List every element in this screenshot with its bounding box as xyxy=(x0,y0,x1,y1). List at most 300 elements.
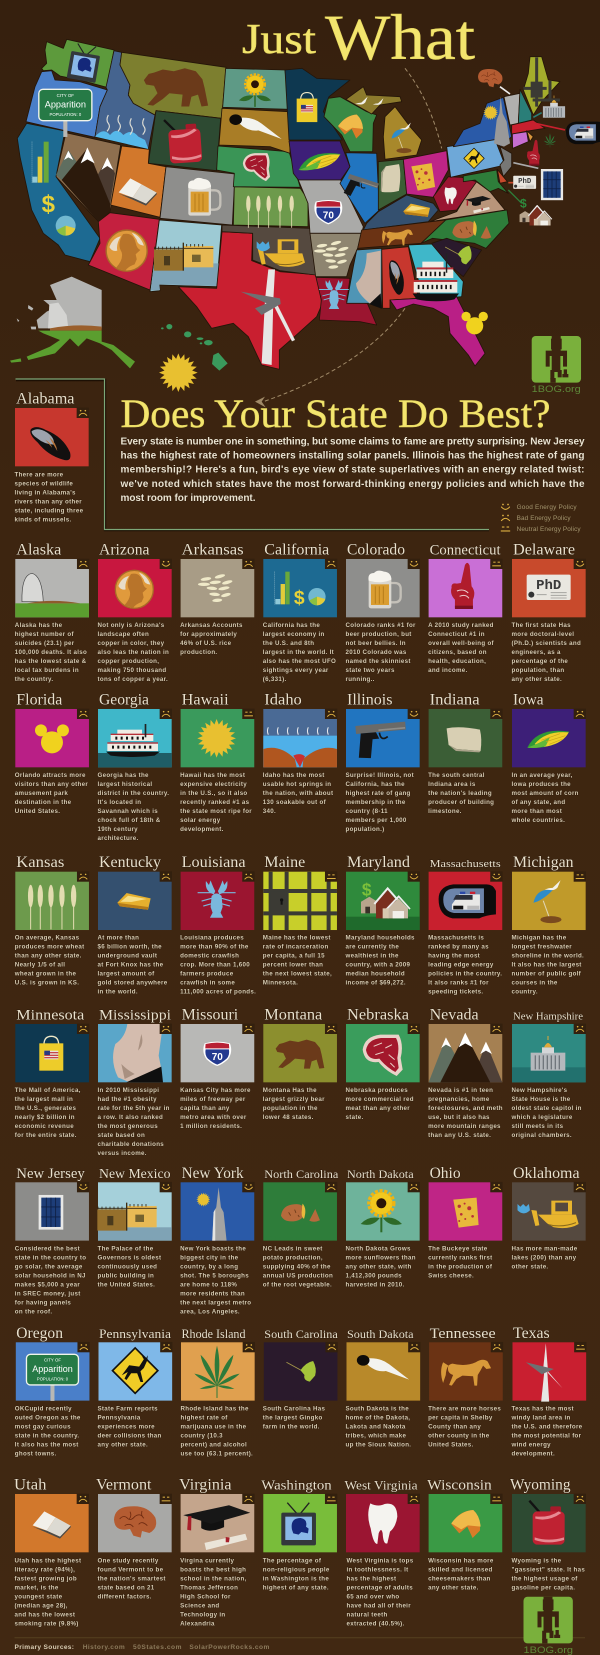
panel: Alabama: Alabama xyxy=(16,390,75,408)
card: Connecticut: Connecticut xyxy=(430,542,501,558)
card: Arizona: making 750 thousand xyxy=(98,667,166,674)
card: Oregon: state in the country. xyxy=(15,1432,79,1439)
icon: corn xyxy=(299,153,341,170)
icon: steak xyxy=(243,153,270,181)
card: Kansas: On average, Kansas xyxy=(15,935,80,942)
icon: copper penny xyxy=(106,230,147,271)
card: Alaska: local tax burdens in xyxy=(15,667,79,674)
icon: dollar and house xyxy=(508,190,552,225)
card: West Virginia: have had all of their xyxy=(346,1602,411,1610)
state: Wisconsin xyxy=(324,97,377,152)
card: Vermont: Vermont xyxy=(96,1476,152,1494)
icon: gulls xyxy=(355,97,383,105)
icon: chart, dollar and pie xyxy=(32,142,76,236)
card: Alaska: the country. xyxy=(15,676,53,683)
card: Minnesota: economic revenue xyxy=(15,1123,74,1130)
card: Colorado: Colorado xyxy=(347,542,405,558)
card: Georgia: district in the country. xyxy=(98,790,169,797)
card: Colorado xyxy=(346,542,420,683)
icon: hot springs xyxy=(95,115,148,149)
card: Indiana: Indiana xyxy=(430,692,480,708)
card: Ohio xyxy=(428,1165,503,1279)
card: Kentucky: gold stored anywhere xyxy=(98,980,168,987)
card: Louisiana: domestic crawfish xyxy=(180,953,239,960)
state: Montana xyxy=(120,52,226,118)
icon: swiss cheese xyxy=(411,163,435,191)
intro text xyxy=(120,436,585,504)
card: South Dakota: up the Sioux Nation. xyxy=(346,1441,411,1448)
card: Illinois: members per 1,000 xyxy=(346,817,407,824)
card: Arkansas: Arkansas Accounts xyxy=(180,622,243,629)
card: New Mexico xyxy=(97,1167,172,1288)
card: Hawaii: Hawaii xyxy=(182,692,229,708)
card: Kansas: Kansas xyxy=(16,854,64,871)
state: Hawaii xyxy=(161,324,228,371)
panel: Alabama: state, including three xyxy=(14,508,84,514)
state: Washington xyxy=(42,39,114,87)
card: Montana: lower 48 states. xyxy=(263,1114,314,1121)
card: Minnesota: the U.S., generates xyxy=(15,1105,76,1112)
card: Arizona: copper in color, they xyxy=(98,640,165,647)
state: Alabama xyxy=(382,247,418,308)
card: North Carolina: supplying 40% of the xyxy=(263,1263,331,1270)
card: Utah: literacy rate (94%), xyxy=(14,1566,75,1574)
card: Tennessee: Tennessee xyxy=(430,1326,496,1342)
card: Delaware: Delaware xyxy=(513,542,575,558)
state: South Carolina xyxy=(432,238,482,277)
card: Missouri: metro area with over xyxy=(180,1114,247,1121)
card: Tennessee xyxy=(428,1326,503,1448)
card: North Dakota: harvested in 2010. xyxy=(346,1281,405,1288)
card: South Carolina: South Carolina Has xyxy=(263,1405,326,1412)
card: Kentucky: at Fort Knox has the xyxy=(98,962,164,969)
card: Kentucky: Kentucky xyxy=(99,854,161,871)
card: Massachusetts xyxy=(428,858,503,996)
card: Massachusetts: Massachusetts xyxy=(430,858,501,870)
state: Virginia xyxy=(430,181,505,222)
card: North Carolina: NC Leads in sweet xyxy=(263,1245,323,1252)
card: New Hampshire: State House is the xyxy=(512,1096,571,1103)
card: North Carolina xyxy=(263,1169,338,1288)
card: Connecticut: overall well-being of xyxy=(428,640,495,647)
card: Arkansas: production. xyxy=(180,649,217,656)
state: California xyxy=(17,123,100,262)
state: Maryland xyxy=(463,170,508,193)
card: Mississippi: charitable donations xyxy=(98,1141,164,1148)
card: Georgia: chock full of 18th & xyxy=(98,817,161,824)
card: Delaware: (Ph.D.) scientists and xyxy=(512,640,581,647)
card: Pennsylvania: Pennsylvania xyxy=(99,1326,171,1341)
card: Maryland: income of $69,272. xyxy=(346,980,406,987)
card: South Carolina: farm in the world. xyxy=(263,1423,320,1430)
icon: police mirror xyxy=(535,122,600,144)
card: Nevada: Nevada is #1 in teen xyxy=(428,1087,493,1094)
icon: gas can xyxy=(164,118,202,164)
state: Arizona xyxy=(88,213,159,290)
card: Wisconsin: skilled and licensed xyxy=(428,1566,493,1574)
intro text: membership!? Here's a fun, bird's eye view of state superlatives with an energy related twist: xyxy=(120,464,584,476)
card: Iowa: of any state, and xyxy=(512,799,565,806)
card: Ohio: Ohio xyxy=(430,1165,461,1182)
card: New York: are home to 118% xyxy=(180,1281,237,1288)
card: New Mexico: the United States. xyxy=(98,1281,155,1288)
state: Nebraska xyxy=(217,146,300,187)
card: Wyoming: Wyoming xyxy=(510,1476,571,1494)
card: Oregon: most gay curious xyxy=(15,1423,71,1430)
intro text: most room for improvement. xyxy=(120,493,256,504)
state: New York xyxy=(453,97,512,147)
footer: primary sources xyxy=(14,1644,270,1651)
card: Michigan: It also has the largest xyxy=(512,962,582,969)
icon: PhD card xyxy=(508,176,536,189)
panel: Alabama: species of wildlife xyxy=(14,480,73,488)
title: Just What xyxy=(242,2,475,74)
card: Missouri: Kansas City has more xyxy=(180,1087,251,1094)
icon: bulldozer and lake xyxy=(257,239,305,267)
card: Louisiana: more than 90% of the xyxy=(180,944,249,951)
card: Alaska: highest number of xyxy=(15,631,75,638)
heading: Does Your State Do Best?: Does Your State Do Best? xyxy=(120,391,550,436)
card: Mississippi: Mississippi xyxy=(99,1008,171,1024)
panel: Alabama: living in Alabama's xyxy=(14,490,76,496)
card: New Mexico: New Mexico xyxy=(99,1167,170,1182)
card: California: California has the xyxy=(263,622,320,629)
card: New York: more residents than xyxy=(180,1290,245,1297)
card: Texas xyxy=(510,1325,586,1457)
state: Wyoming xyxy=(148,111,221,171)
state: New Jersey xyxy=(500,147,512,177)
icon: interstate 70 xyxy=(314,200,342,224)
card: Virginia: High School for xyxy=(180,1594,231,1600)
card: Massachusetts: leading edge energy xyxy=(428,962,494,969)
icon: sun xyxy=(159,353,198,392)
card: West Virginia: percentage of adults xyxy=(346,1584,413,1592)
card: South Dakota: Lakota and Nakota xyxy=(346,1423,406,1430)
icon: shopping bag xyxy=(297,93,317,122)
card: Maryland xyxy=(344,854,420,987)
card: Mississippi: had the #1 obesity xyxy=(98,1096,157,1103)
card: Missouri: Missouri xyxy=(182,1006,239,1024)
card: Louisiana xyxy=(180,854,256,996)
card: Connecticut: and income. xyxy=(428,667,468,674)
card: Washington: highest of any state. xyxy=(263,1584,329,1592)
card: Maryland: country, with a 2009 xyxy=(346,962,410,969)
card: Rhode Island: Rhode Island xyxy=(182,1327,246,1341)
icon: rice xyxy=(314,240,349,269)
card: West Virginia: has the highest xyxy=(346,1576,396,1582)
card: Colorado: running.. xyxy=(346,676,375,683)
card: Michigan: number of public golf xyxy=(512,971,582,978)
card: Vermont: the nation's smartest xyxy=(98,1576,166,1582)
card: Illinois: membership in the xyxy=(346,799,406,806)
card: Wyoming: Wyoming is the xyxy=(512,1558,562,1564)
state: Indiana xyxy=(378,159,407,210)
card: Oregon: outed Oregon as the xyxy=(15,1414,81,1421)
card: Connecticut: Connecticut #1 in xyxy=(428,631,485,638)
card: South Carolina xyxy=(263,1329,338,1430)
card: Delaware xyxy=(512,542,586,683)
card: New Jersey: Considered the best xyxy=(15,1245,80,1252)
map of US states xyxy=(10,39,600,407)
card: Alaska xyxy=(15,542,89,683)
card: Mississippi: In 2010 Mississippi xyxy=(98,1087,159,1094)
card: Iowa: Iowa xyxy=(513,692,544,708)
card: North Carolina: annual US production xyxy=(263,1272,333,1279)
card: Vermont: One study recently xyxy=(98,1558,159,1564)
card: Nevada: Nevada xyxy=(430,1006,479,1024)
state: Massachusetts xyxy=(512,120,545,134)
card: Maryland: Maryland households xyxy=(346,935,415,942)
card: Maine: Maine xyxy=(264,854,305,871)
intro text: Every state is number one in something, but some claims to fame are pretty surprising. New Jersey xyxy=(120,436,585,448)
card: Kansas: wheat grown in the xyxy=(14,971,76,978)
card: California: California xyxy=(264,542,329,558)
card: Mississippi: state based on xyxy=(98,1132,145,1139)
card: New York: New York xyxy=(182,1165,244,1182)
card: Colorado: not beer bellies. In xyxy=(346,640,406,647)
card: Connecticut: A 2010 study ranked xyxy=(428,622,494,629)
arrow: dashed arc to heading xyxy=(255,308,405,407)
state: Oklahoma xyxy=(222,225,316,275)
card: Massachusetts: It also ranks #1 for xyxy=(428,980,489,987)
card: Nevada: use, but it also has xyxy=(428,1114,490,1121)
card: Georgia: Savannah which is xyxy=(98,808,158,815)
card: Georgia: largest historical xyxy=(98,781,152,788)
card: North Dakota: North Dakota Grows xyxy=(346,1245,411,1252)
state: Mississippi xyxy=(347,248,382,308)
card: Florida: visitors than any other xyxy=(15,781,88,788)
card: Oregon xyxy=(15,1325,90,1457)
card: Maryland: Maryland xyxy=(347,854,410,871)
card: California: sightings every year xyxy=(263,667,329,674)
footer: primary sources: Primary Sources: xyxy=(14,1644,74,1651)
card: Michigan: longest freshwater xyxy=(512,944,572,951)
card: New Jersey: in SREC money, just xyxy=(15,1290,81,1297)
card: Hawaii: recently ranked #1 as xyxy=(180,799,250,806)
state: Georgia xyxy=(408,244,463,300)
card: Iowa: more than most xyxy=(512,808,562,815)
card: Missouri: capita than any xyxy=(180,1105,230,1112)
card: Hawaii: Hawaii has the most xyxy=(180,772,245,779)
card: Arizona: Arizona xyxy=(99,542,150,558)
card: New Mexico: continuously used xyxy=(98,1263,157,1270)
icon: riverboat xyxy=(413,253,459,301)
card: North Dakota xyxy=(346,1167,420,1288)
card: Kentucky: underground vault xyxy=(98,953,157,960)
card: Washington: The percentage of xyxy=(263,1558,322,1564)
card: Michigan: Michigan xyxy=(513,854,574,871)
card: New Hampshire: still meets in its xyxy=(512,1123,564,1130)
icon: mouse ears xyxy=(461,312,488,334)
card: Rhode Island: percent) and alcohol xyxy=(180,1441,247,1448)
card: Indiana: producer of building xyxy=(428,799,494,806)
card: Idaho: 130 soakable out of xyxy=(263,799,327,806)
card: Delaware: engineers, as a xyxy=(512,649,561,656)
card: Montana: largest grizzly bear xyxy=(263,1096,325,1103)
card: Kansas: than any other state. xyxy=(15,953,82,960)
state: Pennsylvania xyxy=(447,139,505,177)
card: Washington: Washington xyxy=(261,1478,332,1492)
icon: crawfish xyxy=(319,280,349,309)
card: Hawaii xyxy=(180,692,255,833)
card: Texas: Texas has the most xyxy=(512,1405,574,1412)
icon: ghost town sign xyxy=(39,89,92,137)
card: Oklahoma: other state. xyxy=(512,1263,548,1270)
card: North Carolina: North Carolina xyxy=(264,1169,338,1181)
footer: primary sources: 50States.com xyxy=(133,1644,182,1651)
card: Ohio: currently ranks first xyxy=(428,1254,493,1261)
card: South Carolina: South Carolina xyxy=(264,1329,338,1341)
card: Maine: Minnesota. xyxy=(263,980,298,987)
card: Utah: youngest state xyxy=(14,1594,63,1600)
card: Hawaii: solar energy xyxy=(180,817,221,824)
panel: Alabama: kinds of mussels. xyxy=(14,516,72,524)
card: Nebraska xyxy=(346,1006,420,1121)
card: Hawaii: in the U.S., so it also xyxy=(180,790,248,797)
card: Illinois: population.) xyxy=(346,826,384,833)
card: Oklahoma xyxy=(512,1165,586,1270)
card: Connecticut: citizens, based on xyxy=(428,649,487,656)
card: Wyoming xyxy=(510,1476,586,1592)
card: Louisiana: Louisiana produces xyxy=(180,935,244,942)
card: Georgia: architecture. xyxy=(98,835,139,842)
state: Delaware xyxy=(497,169,507,183)
card: California: $ xyxy=(294,588,305,609)
card: Rhode Island: marijuana use in the xyxy=(180,1423,247,1430)
card: Indiana xyxy=(428,692,503,815)
card: Tennessee: United States. xyxy=(428,1441,474,1448)
card: Indiana: limestone. xyxy=(428,808,462,815)
card: Utah: smoking rate (9.8%) xyxy=(14,1620,79,1628)
card: Pennsylvania: experiences more xyxy=(98,1423,155,1430)
card: Minnesota xyxy=(15,1008,89,1139)
icon: mountains xyxy=(56,147,115,222)
state: Vermont xyxy=(504,93,520,125)
card: Colorado: Colorado ranks #1 for xyxy=(346,622,416,629)
card: Iowa: In an average year, xyxy=(512,772,573,779)
card: Kentucky: $6 billion worth, the xyxy=(98,944,162,951)
card: Wisconsin: any other state. xyxy=(428,1584,479,1592)
card: Illinois: highest rate of gang xyxy=(346,790,411,797)
map icons xyxy=(32,43,600,407)
state: Texas xyxy=(178,232,322,369)
card: Utah: (median age 28), xyxy=(14,1602,68,1610)
state: Ohio xyxy=(403,151,448,197)
card: Maryland: are currently the xyxy=(346,944,399,951)
card: Massachusetts: policies in the country. xyxy=(428,971,502,978)
card: Utah: Utah has the highest xyxy=(14,1558,81,1564)
card: Maine: Maine has the lowest xyxy=(263,935,331,942)
title: Just What: What xyxy=(325,2,475,74)
icon: dollar and house: $ xyxy=(520,196,527,210)
icon: limestone xyxy=(380,164,401,193)
card: West Virginia: extracted (40.5%). xyxy=(346,1620,405,1628)
card: Idaho: usable hot springs in xyxy=(263,781,331,788)
state: Kentucky xyxy=(363,195,438,230)
intro text: we've noted which states have the most forward-thinking energy policies and which have the xyxy=(120,479,585,490)
card: Alaska: Alaska has the xyxy=(15,622,63,629)
icon: television xyxy=(67,43,102,83)
card: Maine: the next lowest state, xyxy=(263,971,332,978)
card: Tennessee: There are more horses xyxy=(428,1405,501,1412)
card: Utah: and has the lowest xyxy=(14,1612,75,1618)
card: Georgia: Georgia xyxy=(99,692,149,708)
card: Hawaii: development. xyxy=(180,826,224,833)
card: Ohio: in the production of xyxy=(428,1263,493,1270)
card: Florida: Florida xyxy=(16,692,62,708)
state: Florida xyxy=(390,297,485,366)
card: Pennsylvania: any other state. xyxy=(98,1441,148,1448)
card: New York: biggest city in the xyxy=(180,1254,239,1261)
card: New Jersey: solar household in NJ xyxy=(15,1272,86,1279)
card: Texas: development. xyxy=(512,1450,555,1457)
card: South Dakota: home of the Dakota, xyxy=(346,1414,410,1421)
card: New York: shot. The 5 boroughs xyxy=(180,1272,249,1279)
card: Arizona: tons of copper a year. xyxy=(98,676,168,683)
card: Texas: windy land area in xyxy=(510,1414,571,1421)
card: New Jersey xyxy=(15,1166,89,1315)
card: Kansas: U.S. is grown in KS. xyxy=(15,980,79,987)
card: California: largest economy in xyxy=(263,631,325,638)
card: Michigan: courses in the xyxy=(512,980,558,987)
card: Nebraska: more commercial red xyxy=(346,1096,414,1103)
icon: feather xyxy=(229,114,282,139)
card: New Mexico: Governors is oldest xyxy=(98,1254,161,1261)
card: New Jersey: for having panels xyxy=(15,1299,71,1306)
card: Tennessee: other county in the xyxy=(428,1432,490,1439)
card: Arkansas: for approximately xyxy=(180,631,237,638)
card: Maine xyxy=(263,854,337,987)
card: Georgia: Georgia has the xyxy=(98,772,149,779)
card: Mississippi: the most generous xyxy=(98,1123,158,1130)
icon: brain xyxy=(478,69,510,94)
card: Oregon: OKCupid recently xyxy=(15,1405,72,1412)
card: Minnesota: Minnesota xyxy=(16,1008,85,1024)
card: Minnesota: The Mall of America, xyxy=(15,1087,81,1094)
card: Wyoming: "gassiest" state. It has xyxy=(512,1566,585,1574)
icon: deer sign xyxy=(464,148,484,169)
card: Indiana: the nation's leading xyxy=(428,790,492,797)
intro text: has the highest rate of homeowners installing solar panels. Illinois has the highest rate of gang xyxy=(120,450,584,462)
card: Montana: Montana Has the xyxy=(263,1087,317,1094)
state: Iowa xyxy=(289,141,350,180)
footer: primary sources: SolarPowerRocks.com xyxy=(189,1644,270,1651)
card: Ohio: Swiss cheese. xyxy=(428,1272,474,1279)
card: Minnesota: the largest mall in xyxy=(15,1096,73,1103)
card: Wisconsin: cheesemakers than xyxy=(428,1576,491,1582)
card: Delaware: percentage of the xyxy=(512,658,568,665)
card: Utah: Utah xyxy=(14,1476,47,1494)
card: Arkansas xyxy=(180,542,255,656)
card: Massachusetts: ranked by many as xyxy=(428,944,489,951)
card: South Dakota: tribes, which make xyxy=(346,1432,407,1439)
card: New York: New York boasts the xyxy=(180,1245,246,1252)
card: Maryland: $ xyxy=(362,880,372,900)
card: Pennsylvania: deer collisions than xyxy=(98,1432,162,1439)
card: Nevada: more mountain ranges xyxy=(428,1123,501,1130)
card: Texas: the most potential for xyxy=(512,1432,582,1439)
panel: Alabama xyxy=(14,390,89,524)
card: South Dakota: South Dakota xyxy=(347,1327,414,1341)
logo: 1BOG top: 1BOG.org xyxy=(532,384,581,395)
card: Wisconsin xyxy=(427,1478,503,1592)
panel: Alabama: rivers than any other xyxy=(14,498,82,506)
card: Kentucky: in the world. xyxy=(98,989,138,996)
icon: gingko xyxy=(445,246,472,264)
card: Delaware: The first state Has xyxy=(512,622,571,629)
card: New York: country, by a long xyxy=(180,1263,238,1270)
card: Vermont: different factors. xyxy=(98,1594,152,1600)
